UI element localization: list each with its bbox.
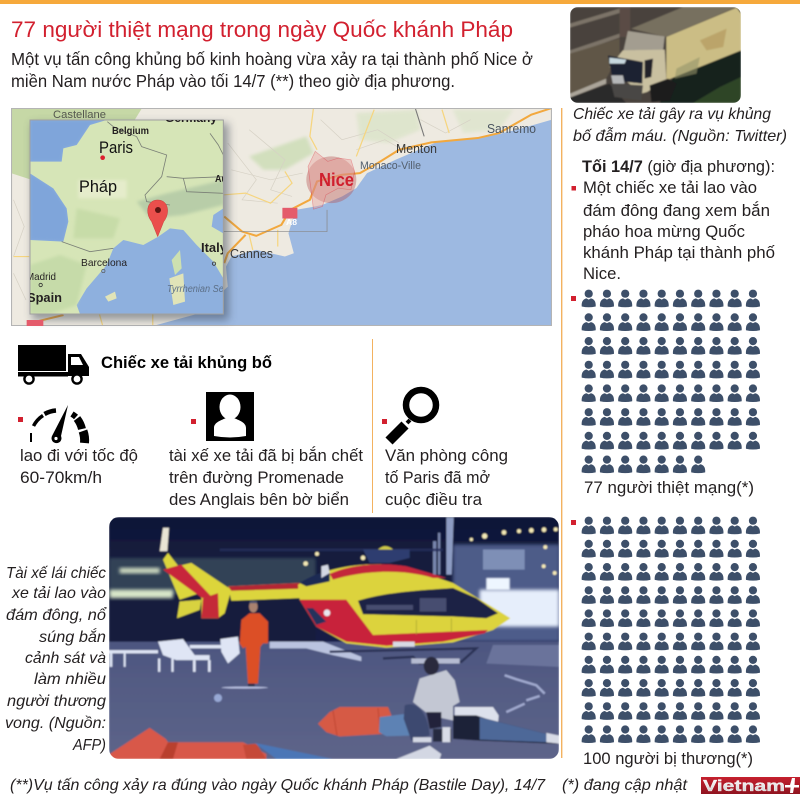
inset map of France	[27, 120, 229, 326]
text: investigation: cuộc điều tra	[385, 491, 483, 509]
inset map labels: Germany	[165, 111, 217, 125]
icon: truck	[18, 345, 89, 384]
map labels: Sanremo	[487, 121, 536, 136]
footnote: date: (**)Vụ tấn công xảy ra đúng vào ngày Quốc khánh Pháp (Bastile Day), 14/7	[10, 777, 546, 794]
bullet	[382, 419, 387, 424]
intro text: miền Nam nước Pháp vào tối 14/7 (**) theo giờ địa phương.	[11, 71, 455, 91]
text: speed: lao đi với tốc độ	[20, 447, 138, 465]
text: investigation: tố Paris đã mở	[385, 469, 490, 487]
helicopter	[160, 528, 510, 663]
text: driver	[169, 446, 363, 509]
map labels: A8	[286, 218, 298, 227]
text: speed	[20, 447, 138, 487]
left photo caption: người thương	[7, 693, 106, 710]
inset map labels: Tyrrhenian Sea	[167, 284, 229, 295]
left photo caption: Tài xế lái chiếc	[6, 565, 106, 582]
divider: center orange line	[372, 339, 373, 513]
bullet: injured	[571, 520, 576, 525]
logo: Vietnam+: Vietnam	[703, 778, 785, 795]
event description: Nice.	[583, 265, 621, 283]
event description: pháo hoa mừng Quốc	[583, 223, 745, 241]
icon: magnifying glass	[389, 390, 436, 441]
standing rescuer	[221, 600, 268, 689]
bullet: deaths	[571, 296, 576, 301]
truck photo caption	[573, 106, 787, 145]
intro text	[11, 49, 533, 91]
chart: 77 people icons	[582, 290, 760, 473]
footnote: updating: (*) đang cập nhật	[562, 777, 688, 794]
left photo caption: súng bắn	[39, 627, 106, 646]
left photo caption	[5, 565, 107, 754]
inset map labels: Pháp	[79, 177, 117, 196]
logo: Vietnam+	[701, 777, 800, 795]
divider: right orange line	[561, 108, 562, 758]
map labels: Nice	[319, 170, 354, 190]
label: injured: 100 người bị thương(*)	[583, 750, 753, 768]
bullet	[191, 419, 196, 424]
text: speed: 60-70km/h	[20, 469, 102, 487]
top accent bar	[0, 0, 800, 4]
bullet	[18, 417, 23, 422]
photo: helicopter scene	[109, 517, 559, 759]
title: 77 người thiệt mạng trong ngày Quốc khánh Pháp	[11, 17, 513, 42]
map labels: Monaco-Ville	[360, 160, 421, 172]
left photo caption: cảnh sát và	[25, 650, 106, 667]
left photo caption: xe tải lao vào	[11, 585, 106, 602]
map labels: Cannes	[230, 246, 273, 261]
inset map labels: Madrid	[26, 271, 56, 283]
event description: đám đông đang xem bắn	[583, 201, 770, 220]
event description: khánh Pháp tại thành phố	[583, 244, 775, 262]
rail and chairs	[109, 637, 361, 672]
left photo caption: AFP)	[72, 737, 106, 754]
event description	[572, 158, 775, 283]
icon: speedometer	[31, 405, 85, 443]
left photo caption: làm nhiều	[34, 671, 106, 688]
intro text: Một vụ tấn công khủng bố kinh hoàng vừa xảy ra tại thành phố Nice ở	[11, 49, 533, 69]
truck photo caption: bố đẫm máu. (Nguồn: Twitter)	[573, 126, 787, 145]
photo: truck	[570, 7, 741, 103]
label: deaths: 77 người thiệt mạng(*)	[584, 479, 754, 497]
investigation item	[382, 390, 508, 509]
inset map labels: Paris	[99, 138, 133, 157]
text: driver: des Anglais bên bờ biển	[169, 491, 349, 509]
left photo caption: vong. (Nguồn:	[5, 715, 106, 732]
truck photo caption: Chiếc xe tải gây ra vụ khủng	[573, 106, 771, 123]
bullet	[572, 186, 576, 190]
heading: truck: Chiếc xe tải khủng bố	[101, 354, 272, 372]
map labels: Castellane	[53, 109, 106, 121]
inset map labels: Spain	[27, 290, 62, 305]
text: investigation	[385, 447, 508, 509]
left photo caption: đám đông, nổ	[6, 606, 107, 624]
seated people	[110, 657, 559, 759]
inset map labels: Barcelona	[81, 257, 127, 269]
map labels	[53, 109, 536, 261]
chart: 100 people icons	[582, 517, 760, 743]
driver item	[169, 392, 363, 509]
event description: Một chiếc xe tải lao vào	[583, 179, 757, 197]
panel: map of Nice and France	[11, 108, 552, 326]
map labels: Menton	[396, 141, 437, 156]
text: driver: trên đường Promenade	[169, 469, 344, 487]
text: driver: tài xế xe tải đã bị bắn chết	[169, 446, 363, 465]
inset map labels	[26, 111, 229, 305]
inset map labels: Au	[215, 174, 227, 185]
inset map labels: Italy	[201, 240, 228, 255]
event description: Tối 14/7 (giờ địa phương):	[582, 158, 775, 176]
icon: driver portrait	[206, 392, 254, 441]
speed item	[18, 405, 138, 487]
inset map labels: Belgium	[112, 125, 149, 137]
text: investigation: Văn phòng công	[385, 447, 508, 465]
